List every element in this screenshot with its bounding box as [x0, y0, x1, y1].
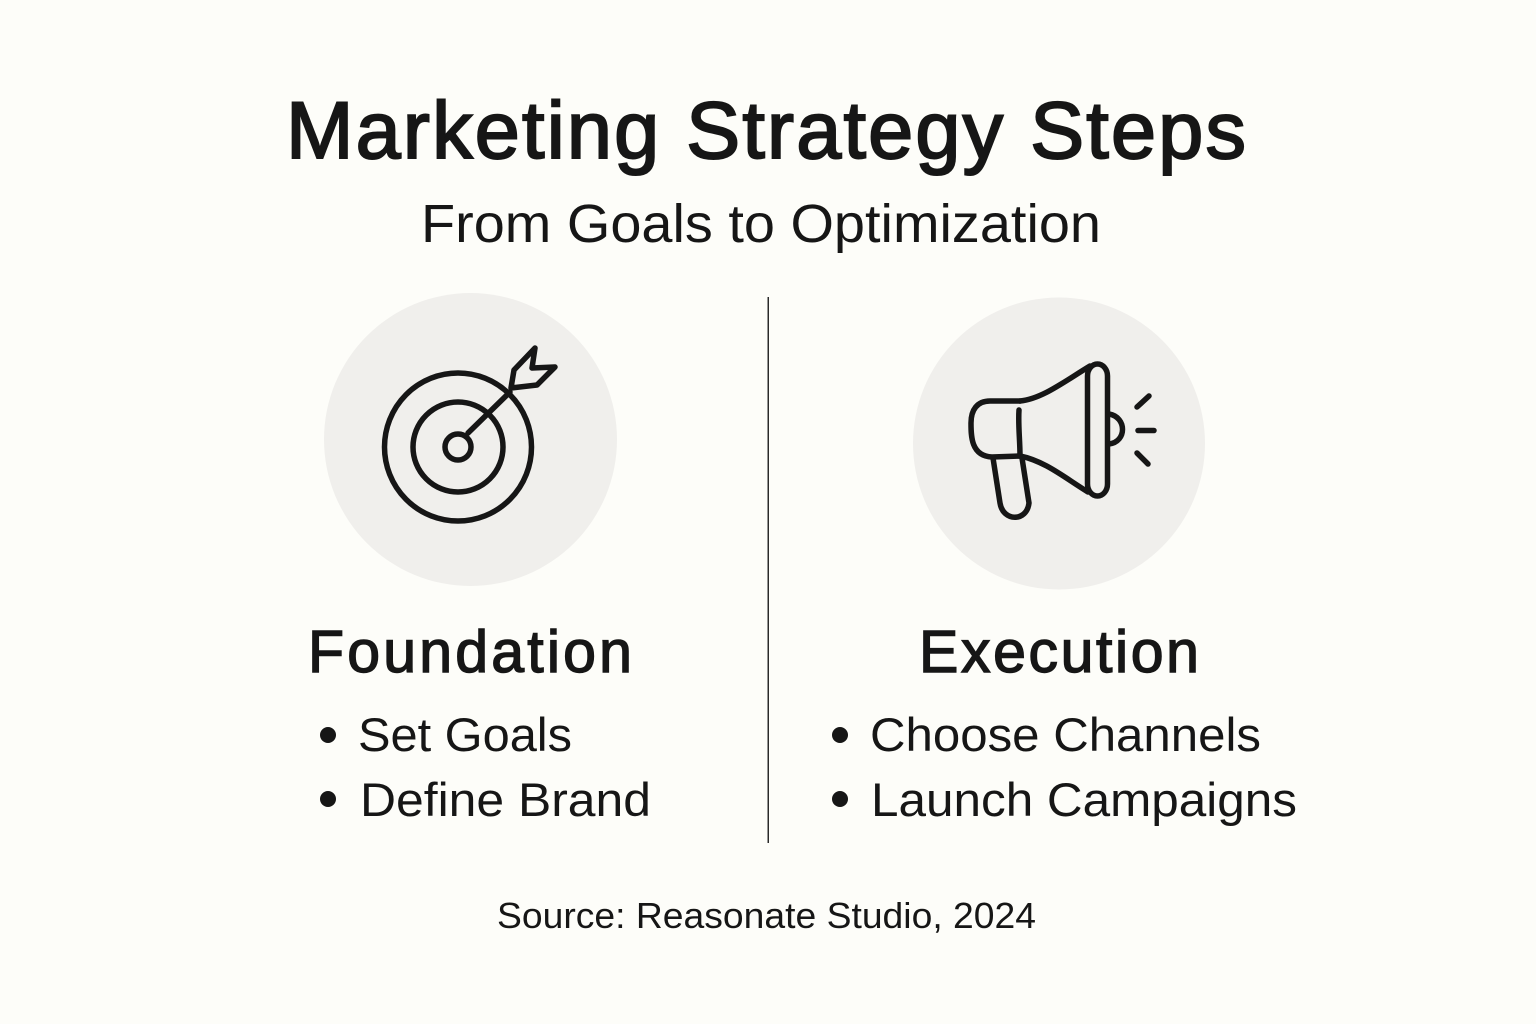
- title: Marketing Strategy Steps: [286, 86, 1246, 176]
- icon: megaphone: [913, 298, 1205, 590]
- list: execution items: [832, 708, 1297, 826]
- heading: foundation: Foundation: [308, 619, 632, 685]
- subtitle: From Goals to Optimization: [421, 194, 1101, 254]
- panel: execution: [832, 298, 1297, 826]
- panel: foundation: [308, 293, 651, 826]
- list: foundation items: [320, 708, 651, 826]
- list: execution items: Launch Campaigns: [871, 773, 1297, 826]
- list: foundation items: Set Goals: [358, 708, 572, 761]
- source note: Source: Reasonate Studio, 2024: [497, 895, 1036, 936]
- icon: target with arrow: [324, 293, 617, 586]
- list: foundation items: Define Brand: [360, 773, 651, 826]
- heading: execution: Execution: [919, 619, 1199, 685]
- list: execution items: Choose Channels: [870, 708, 1261, 761]
